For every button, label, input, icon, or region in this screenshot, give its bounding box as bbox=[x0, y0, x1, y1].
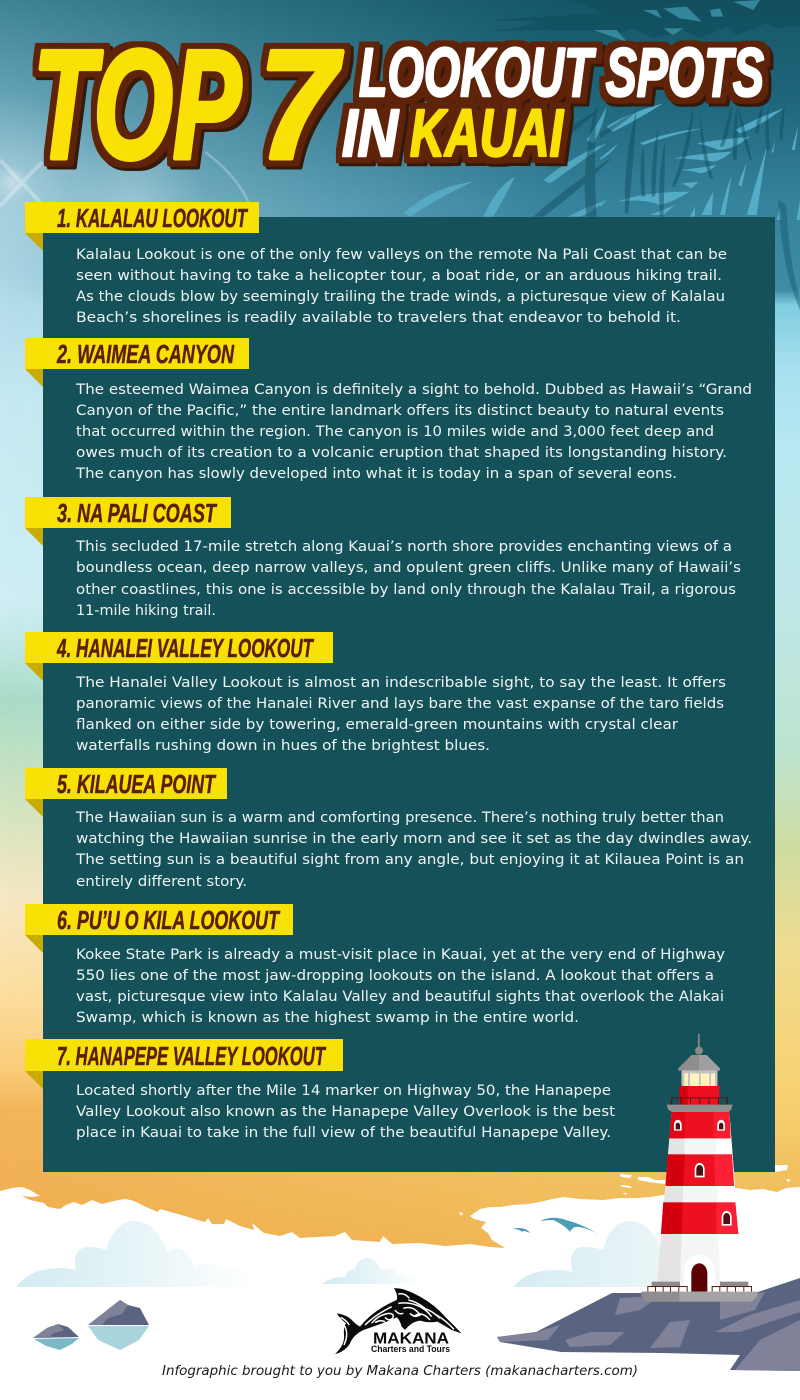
text block 7: place in Kauai to take in the full view of the beautiful Hanapepe Valley. bbox=[76, 1125, 611, 1141]
banner heading 6 bbox=[25, 904, 293, 953]
lighthouse: gallery bbox=[667, 1105, 733, 1112]
banner heading 5 bbox=[25, 768, 227, 817]
text block 1: Beach’s shorelines is readily available to travelers that endeavor to behold it. bbox=[76, 310, 681, 326]
text block 5: The setting sun is a beautiful sight from any angle, but enjoying it at Kilauea Point is an bbox=[75, 852, 744, 868]
banner heading 1: 1. KALALAU LOOKOUT bbox=[57, 203, 248, 233]
lighthouse: lantern room bbox=[682, 1071, 717, 1086]
text block 5: watching the Hawaiian sunrise in the early morn and see it set as the day dwindles away. bbox=[76, 831, 752, 847]
text block 4: panoramic views of the Hanalei River and lays bare the vast expanse of the taro fields bbox=[76, 696, 724, 712]
banner heading 2: 2. WAIMEA CANYON bbox=[56, 339, 235, 369]
cloud: large left bbox=[16, 1221, 253, 1287]
banner heading 1 bbox=[25, 202, 259, 251]
text block 7 bbox=[76, 1083, 615, 1141]
lighthouse: base and railings bbox=[642, 1282, 757, 1302]
banner heading 4 bbox=[25, 632, 333, 681]
text block 2: owes much of its creation to a volcanic eruption that shaped its longstanding history. bbox=[76, 445, 727, 461]
text block 6: Swamp, which is known as the highest swamp in the entire world. bbox=[76, 1010, 579, 1026]
cloud: right bbox=[513, 1221, 662, 1287]
text block 4: waterfalls rushing down in hues of the brightest blues. bbox=[76, 738, 490, 754]
rocks: two rocks with reflections bbox=[33, 1300, 149, 1350]
text block 6: vast, picturesque view into Kalalau Valley and beautiful sights that overlook the Alakai bbox=[76, 989, 724, 1005]
banner heading 3 bbox=[25, 497, 231, 546]
text block 1 bbox=[76, 247, 727, 326]
icon: large bird bbox=[540, 1218, 598, 1234]
logo: makana charters bbox=[335, 1288, 462, 1354]
section 3: na pali coast bbox=[25, 497, 741, 619]
text block 2: The canyon has slowly developed into what it is today in a span of several eons. bbox=[75, 466, 677, 482]
rock: small bbox=[33, 1324, 79, 1350]
section 1: kalalau lookout bbox=[25, 202, 727, 326]
lighthouse: red stripes bbox=[661, 1112, 738, 1234]
title: in: IN bbox=[342, 96, 399, 171]
lighthouse: spire and roof bbox=[678, 1034, 720, 1071]
bottom white torn paper bbox=[0, 1165, 800, 1400]
text block 1: As the clouds blow by seemingly trailing the trade winds, a picturesque view of Kalalau bbox=[76, 289, 725, 305]
footer credit: Infographic brought to you by Makana Charters (makanacharters.com) bbox=[162, 1363, 638, 1379]
section 5: kilauea point bbox=[25, 768, 752, 890]
text block 6: 550 lies one of the most jaw-dropping lookouts on the island. A lookout that offers a bbox=[76, 968, 714, 984]
text block 5 bbox=[75, 810, 752, 890]
title: top: TOP bbox=[33, 18, 241, 191]
text block 5: The Hawaiian sun is a warm and comforting presence. There’s nothing truly better than bbox=[75, 810, 724, 826]
section 2: waimea canyon bbox=[25, 338, 752, 482]
text block 1: Kalalau Lookout is one of the only few valleys on the remote Na Pali Coast that can be bbox=[76, 247, 727, 263]
banner heading 7 bbox=[25, 1039, 343, 1089]
text block 2 bbox=[75, 382, 752, 482]
lighthouse: top red section and rail bbox=[671, 1086, 728, 1105]
text block 6 bbox=[76, 947, 725, 1026]
icon: tribal dolphin bbox=[335, 1288, 462, 1354]
rock: large bbox=[88, 1300, 149, 1350]
text block 2: that occurred within the region. The canyon is 10 miles wide and 3,000 feet deep and bbox=[76, 424, 714, 440]
lighthouse: windows bbox=[674, 1120, 732, 1226]
text block 3: This secluded 17-mile stretch along Kauai’s north shore provides enchanting views of a bbox=[75, 539, 732, 555]
banner heading 6: 6. PU’U O KILA LOOKOUT bbox=[57, 905, 280, 935]
text block 1: seen without having to take a helicopter tour, a boat ride, or an arduous hiking trail. bbox=[76, 268, 722, 284]
banner heading 3: 3. NA PALI COAST bbox=[57, 498, 217, 528]
lighthouse bbox=[642, 1034, 757, 1302]
palm fronds bbox=[403, 0, 800, 310]
text block 3: boundless ocean, deep narrow valleys, and opulent green cliffs. Unlike many of Hawaii’s bbox=[76, 560, 741, 576]
section 7: hanapepe valley lookout bbox=[25, 1039, 615, 1141]
cliff bbox=[497, 1278, 800, 1371]
text block 4: flanked on either side by towering, emerald-green mountains with crystal clear bbox=[76, 717, 678, 733]
logo wordmark: MAKANA bbox=[373, 1330, 449, 1348]
banner heading 7: 7. HANAPEPE VALLEY LOOKOUT bbox=[57, 1041, 326, 1071]
birds bbox=[512, 1218, 598, 1234]
title bbox=[33, 18, 764, 191]
text block 7: Valley Lookout also known as the Hanapepe Valley Overlook is the best bbox=[76, 1104, 615, 1120]
title: kauai: KAUAI bbox=[410, 96, 564, 171]
text block 4: The Hanalei Valley Lookout is almost an indescribable sight, to say the least. It offers bbox=[75, 675, 726, 691]
text block 3: 11-mile hiking trail. bbox=[76, 603, 216, 619]
lighthouse: white tower bbox=[657, 1112, 743, 1287]
text block 2: Canyon of the Pacific,” the entire landmark offers its distinct beauty to natural events bbox=[76, 403, 724, 419]
text block 3 bbox=[75, 539, 741, 619]
text block 6: Kokee State Park is already a must-visit place in Kauai, yet at the very end of Highway bbox=[76, 947, 725, 963]
banner heading 4: 4. HANALEI VALLEY LOOKOUT bbox=[56, 633, 314, 663]
text block 2: The esteemed Waimea Canyon is definitely a sight to behold. Dubbed as Hawaii’s “Grand bbox=[75, 382, 752, 398]
text block 4 bbox=[75, 675, 726, 754]
cloud: small centre bbox=[322, 1258, 422, 1284]
icon: small bird bbox=[512, 1228, 530, 1233]
banner heading 2 bbox=[25, 338, 249, 387]
section 4: hanalei valley lookout bbox=[25, 632, 726, 754]
text block 7: Located shortly after the Mile 14 marker on Highway 50, the Hanapepe bbox=[76, 1083, 611, 1099]
text block 5: entirely different story. bbox=[76, 874, 247, 890]
panel: content background bbox=[43, 217, 775, 1172]
logo tagline: Charters and Tours bbox=[371, 1344, 450, 1354]
lighthouse: door bbox=[684, 1255, 715, 1292]
text block 3: other coastlines, this one is accessible by land only through the Kalalau Trail, a rigorous bbox=[76, 582, 736, 598]
title: 7: 7 bbox=[259, 18, 343, 191]
sun glare bbox=[0, 90, 250, 270]
banner heading 5: 5. KILAUEA POINT bbox=[57, 769, 216, 799]
section 6: pu'u o kila lookout bbox=[25, 904, 725, 1026]
